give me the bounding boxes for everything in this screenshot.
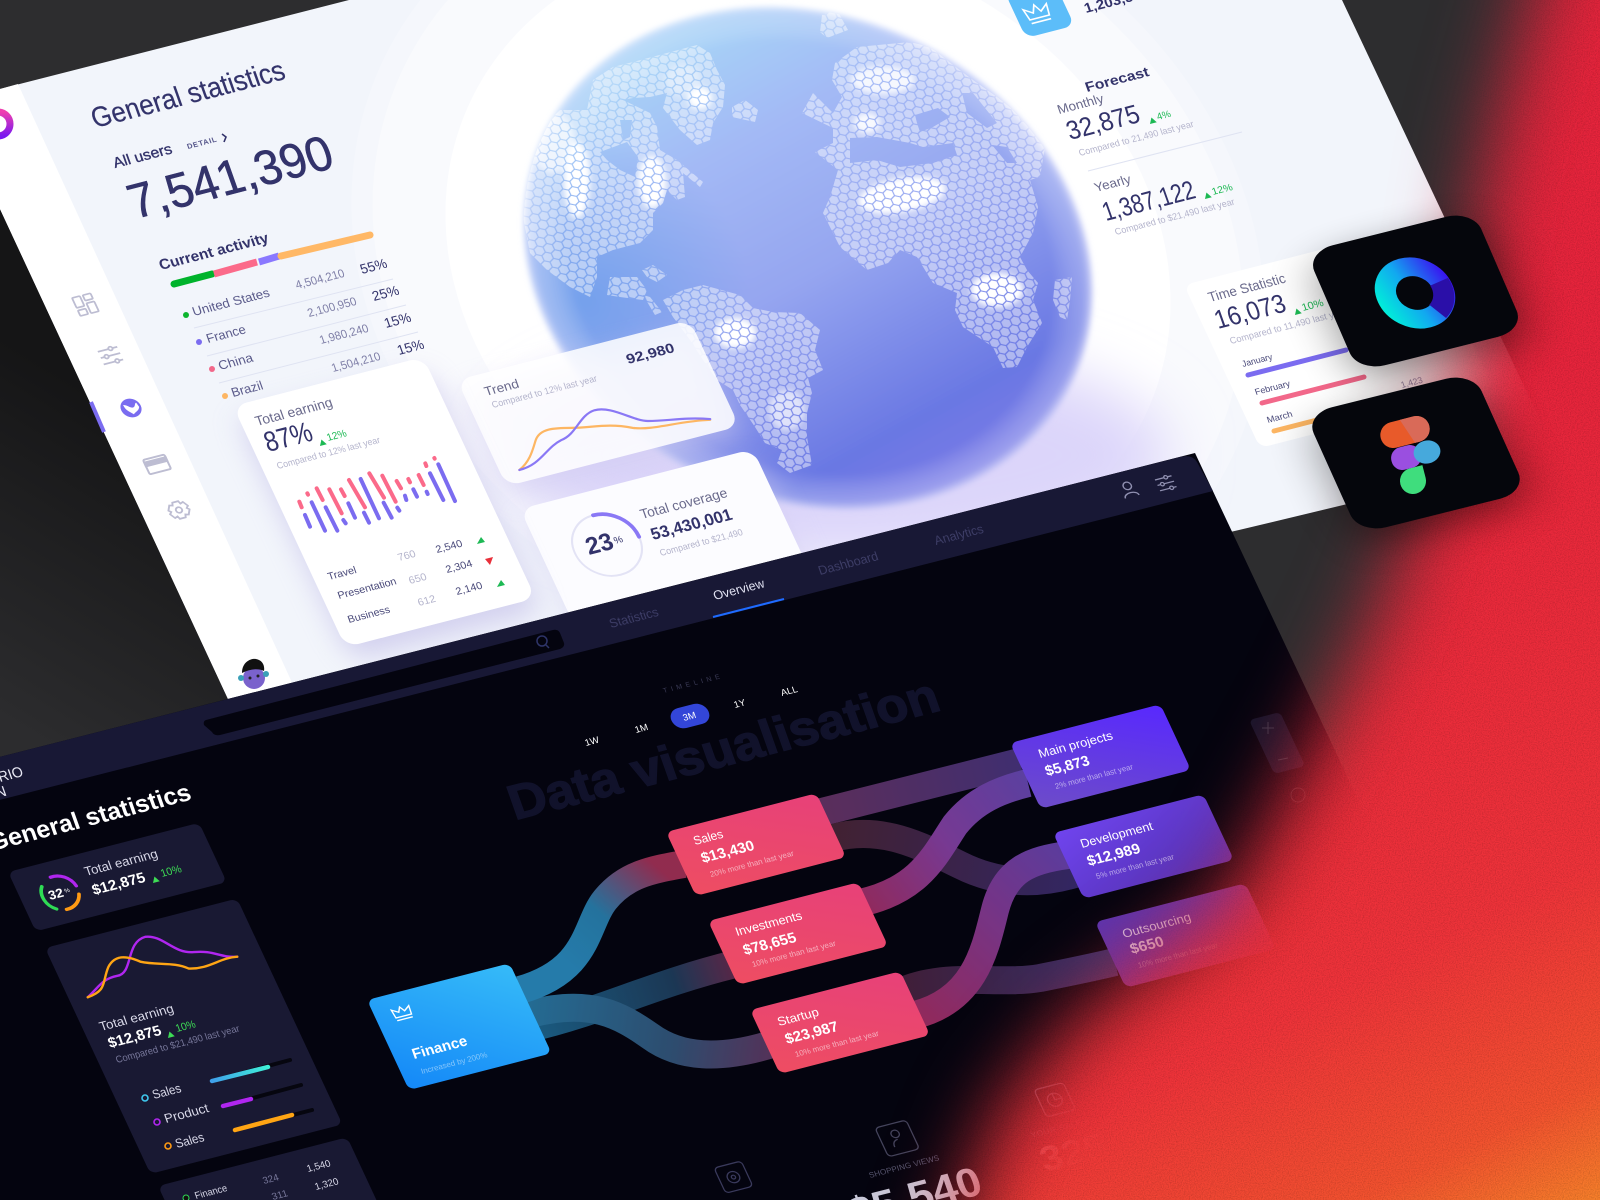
nav tabs: Dashboard [816,549,880,578]
watermark: data visualisation: Data visualisation [500,668,946,830]
node: main projects: 2% more than last year [1054,762,1135,791]
coverage title: Total coverage [638,485,730,522]
finance label: Finance [410,1034,470,1063]
globe sphere [520,4,1096,512]
earning title: Total earning [253,394,335,429]
legend bars: Sales [150,1081,183,1102]
card: dark total earning [8,823,227,931]
node: sales: $13,430 [699,838,757,867]
earning table [326,537,505,626]
time bars: February [1253,378,1292,397]
earning table: Travel [326,565,358,583]
card: dark earning chart [45,898,342,1174]
node: development: Development [1078,819,1155,851]
icon: header sliders [1154,474,1177,492]
search field [204,630,564,735]
node: main projects: $5,873 [1043,754,1092,780]
dark earning text: Total earning [82,846,160,879]
coverage percent: % [612,534,625,547]
chart subtitle: Compared to $21,490 last year [114,1024,242,1066]
all users label [111,134,226,172]
heading: general statistics: General statistics [87,55,289,135]
legend bars: Product [162,1100,211,1126]
chart delta: 10% [174,1019,198,1035]
donut ring [1376,261,1454,325]
country table: United States [190,285,272,319]
chart delta [166,1019,198,1038]
icon: dashboard grid [72,293,99,316]
node: investments: 10% more than last year [751,939,837,969]
earning delta [318,429,348,446]
card: total earning [233,357,542,661]
logo: partial ring [0,112,10,136]
bottom stat: shopping views [841,1120,988,1200]
node: main projects [1010,704,1191,809]
brand label [0,765,26,802]
node: sales: Sales [691,827,725,848]
icon: sliders [97,345,124,366]
node: investments [708,882,888,985]
node: development [1053,794,1234,899]
node: startup [750,971,930,1074]
icon: crown [391,1005,414,1021]
forecast monthly: Compared to 21,490 last year [1077,119,1195,159]
dark earning delta: 10% [159,863,184,880]
forecast yearly: 12% [1210,182,1235,198]
current activity heading: Current activity [157,231,272,274]
trend line chart [519,409,710,470]
node: investments: $78,655 [741,930,799,959]
earning subtitle: Compared to 12% last year [275,435,382,472]
icon: user [1119,481,1139,498]
country table: 1,980,240 [317,321,371,347]
country table: 15% [395,336,426,358]
dark line chart [88,937,237,997]
trend title: Trend [482,376,521,399]
trend value: 92,980 [624,340,677,367]
all users label: All users [111,142,175,172]
all users label: DETAIL [186,135,218,151]
timeline selector: ALL [779,684,799,699]
time value: 16,073 [1210,289,1290,335]
node: outsourcing [1095,883,1276,988]
icon: globe active [117,396,145,420]
forecast monthly [1055,91,1195,159]
earning percent: 87% [260,417,317,459]
card: dark table [158,1137,389,1200]
earning delta: 12% [325,429,348,444]
node: main projects: Main projects [1036,729,1115,761]
earning bar chart [299,458,455,531]
time delta: 10% [1300,298,1325,314]
sidebar [0,84,300,700]
finance note: Increased by 200% [420,1050,489,1076]
time subtitle: Compared to 11,490 last year [1228,307,1348,347]
stacked activity bar [174,235,370,284]
legend bars: Sales [173,1130,206,1151]
nav tabs: Analytics [932,521,985,548]
donut value: % [64,888,72,895]
globe rings [208,0,1408,755]
icon: figma tile [1305,372,1533,546]
node: development: $12,989 [1085,841,1143,870]
card: total coverage [520,449,820,655]
coverage percent: 23 [582,529,617,561]
big number: 7,541,390 [120,125,340,229]
active marker [91,402,104,432]
icon: gear [166,499,192,521]
donut [35,872,85,914]
timeline selector: 1W [583,735,601,749]
time bars: January [1240,352,1274,369]
node: outsourcing: 10% more than last year [1137,941,1220,970]
country table: 55% [358,255,389,277]
node: investments: Investments [733,909,804,939]
card: dark table: 324 [261,1172,281,1187]
card: trend [457,320,744,498]
country table: 25% [370,282,401,304]
forecast yearly: Yearly [1092,171,1133,195]
globe [520,4,1096,512]
country table: 2,100,950 [305,294,359,320]
earning table: 2,540 [434,539,464,556]
node: startup: 10% more than last year [794,1029,880,1059]
node: sales [666,793,846,896]
earning table: 760 [396,549,418,564]
nav tabs: Overview [711,576,767,603]
nav tabs: Statistics [607,604,660,631]
red orange gradient glow [898,0,1600,1200]
country table: Brazil [229,378,265,400]
earning table: 2,140 [454,581,484,598]
chart title: Total earning [97,1001,176,1034]
donut value: 32 [46,885,66,903]
forecast yearly: 1,387,122 [1098,175,1199,227]
node: finance [367,963,552,1090]
bottom stat: shopping views: SHOPPING VIEWS [868,1153,941,1180]
country table: France [204,322,248,346]
time bars [1240,350,1424,431]
forecast monthly: Monthly [1055,91,1106,117]
node: startup: $23,987 [783,1019,841,1048]
card: time statistic [1184,225,1493,448]
badge: crown [1005,0,1074,38]
zoom control [1249,712,1305,802]
forecast yearly: Compared to $21,490 last year [1113,197,1236,238]
header bar [0,456,1213,805]
bottom stat: your sales: YOUR SALES [1030,1117,1089,1140]
bottom stat: your sales [1030,1082,1112,1179]
node: outsourcing: Outsourcing [1120,910,1193,941]
legend bars [142,1060,312,1151]
country table: 4,504,210 [293,266,347,292]
panel: dark dashboard [0,453,1570,1200]
sankey flows [520,762,1115,1054]
icon: donut logo tile [1306,210,1531,384]
dark earning value: $12,875 [90,870,148,899]
bottom stat: view icon [714,1161,753,1193]
node: sales: 20% more than last year [709,849,795,879]
timeline selector [583,674,799,749]
chart value: $12,875 [106,1023,164,1052]
country table: 15% [382,309,413,331]
timeline selector: 1M [633,722,650,736]
dark earning delta [151,863,184,883]
dark surface [0,453,1570,1200]
country table: China [216,350,256,373]
node: outsourcing: $650 [1128,934,1166,958]
forecast monthly: 32,875 [1062,99,1144,146]
time title: Time Statistic [1206,270,1288,305]
card: dark table: 1,540 [305,1158,333,1175]
country table [183,255,426,400]
icon: card [143,454,171,474]
time bars: March [1265,409,1294,425]
figma mark [1378,413,1443,497]
time bars: 1,423 [1399,375,1424,390]
hex map continents [523,10,1072,473]
card: dark table: 1,320 [313,1176,341,1193]
time delta [1293,298,1325,315]
trend subtitle: Compared to 12% last year [490,374,599,411]
country table: 1,504,210 [329,349,383,375]
earning table: 2,304 [444,559,474,576]
forecast monthly: 4% [1155,109,1173,123]
nav tabs [607,521,985,631]
avatar [238,659,270,691]
forecast heading: Forecast [1083,63,1151,95]
bottom stat: your sales: 325 [1034,1126,1112,1179]
earning table: Presentation [336,576,398,602]
earning table: 612 [416,594,438,609]
coverage subtitle: Compared to $21,490 [658,527,744,559]
node: startup: Startup [775,1005,821,1029]
coverage gauge [561,507,653,583]
timeline selector: 3M [681,710,698,724]
timeline selector: TIMELINE [662,674,721,695]
coverage value: 53,430,001 [648,505,735,544]
light dashboard surface [0,0,1556,720]
earning table: 650 [407,572,429,587]
earning table: Business [346,605,392,626]
node: development: 5% more than last year [1095,852,1176,881]
timeline selector: 1Y [732,697,748,711]
